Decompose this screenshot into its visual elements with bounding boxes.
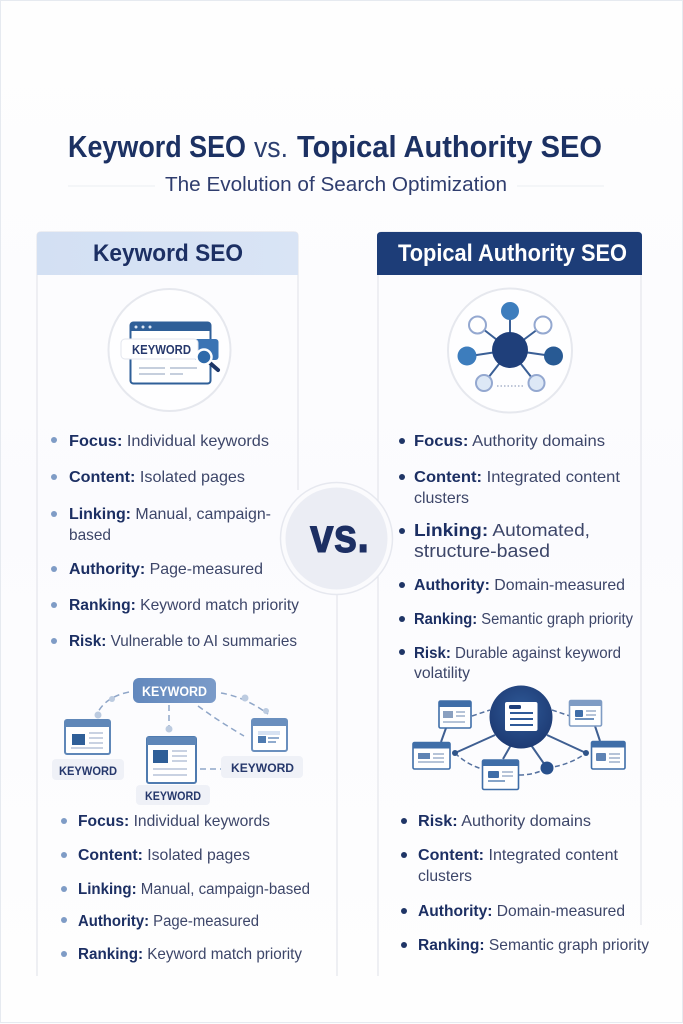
item: content: Content: Isolated pages bbox=[78, 847, 250, 864]
panel header: Topical Authority SEO bbox=[377, 232, 642, 275]
item: linking: Linking: Automated, bbox=[414, 520, 590, 540]
item: authority: Authority: Domain-measured bbox=[418, 903, 625, 920]
panel header: Keyword SEO bbox=[37, 232, 298, 275]
item: risk: Risk: Durable against keyword bbox=[414, 645, 621, 662]
keyword hub pill bbox=[133, 678, 216, 703]
item: linking: Linking: Manual, campaign-based bbox=[78, 881, 310, 898]
vs badge bbox=[280, 482, 392, 594]
icon: topic cluster network bbox=[448, 288, 572, 412]
item: risk bbox=[399, 645, 621, 682]
item: focus: Focus: Individual keywords bbox=[78, 813, 270, 830]
item: content: clusters bbox=[418, 868, 472, 885]
item: content: Content: Isolated pages bbox=[69, 469, 245, 486]
item: linking: structure-based bbox=[414, 541, 550, 561]
page B bbox=[147, 737, 196, 783]
item: linking bbox=[399, 520, 590, 561]
keyword label 3: KEYWORD bbox=[231, 761, 294, 775]
item: linking: based bbox=[69, 527, 111, 544]
item: authority: Authority: Page-measured bbox=[69, 561, 263, 578]
list: keyword SEO attributes bbox=[51, 433, 299, 650]
page 3 bbox=[482, 760, 518, 790]
item: linking bbox=[51, 506, 271, 544]
page C bbox=[252, 719, 287, 751]
keyword label 2 bbox=[136, 785, 210, 805]
item: content: Content: Integrated content bbox=[414, 469, 621, 486]
page 1 bbox=[439, 701, 471, 728]
page 2 bbox=[413, 742, 450, 769]
keyword hub pill: KEYWORD bbox=[142, 684, 207, 699]
page 5 bbox=[592, 742, 625, 769]
item: focus: Focus: Individual keywords bbox=[69, 433, 269, 450]
vs badge: vs. bbox=[310, 510, 369, 563]
keyword label 3 bbox=[221, 756, 303, 778]
page 4 bbox=[570, 700, 602, 726]
page A bbox=[65, 720, 110, 754]
item: content bbox=[401, 847, 619, 885]
item: authority: Authority: Page-measured bbox=[78, 913, 259, 930]
icon: keyword search browser bbox=[108, 289, 230, 411]
keyword label 2: KEYWORD bbox=[145, 789, 201, 803]
item: linking: Linking: Manual, campaign- bbox=[69, 506, 271, 523]
icon: keyword search browser: KEYWORD bbox=[132, 343, 191, 357]
list: topical authority attributes bbox=[399, 433, 633, 682]
keyword label 1 bbox=[52, 759, 124, 780]
title: vs. bbox=[254, 132, 288, 164]
hub document bbox=[490, 686, 552, 748]
item: risk: Risk: Vulnerable to AI summaries bbox=[69, 633, 297, 650]
title: Topical Authority SEO bbox=[297, 129, 602, 164]
item: content: clusters bbox=[414, 490, 469, 507]
item: ranking: Ranking: Semantic graph priority bbox=[418, 937, 649, 954]
panel: Topical Authority SEO bbox=[377, 232, 649, 976]
panel: Keyword SEO bbox=[37, 232, 337, 976]
list: keyword SEO lower attributes bbox=[61, 813, 310, 963]
keyword label 1: KEYWORD bbox=[59, 764, 117, 778]
panel header: Keyword SEO: Keyword SEO bbox=[93, 240, 243, 267]
item: risk: Risk: Authority domains bbox=[418, 813, 591, 830]
item: content: Content: Integrated content bbox=[418, 847, 619, 864]
item: ranking: Ranking: Semantic graph priority bbox=[414, 611, 633, 628]
item: authority: Authority: Domain-measured bbox=[414, 577, 625, 594]
diagram: keyword pages network bbox=[52, 678, 303, 805]
item: content bbox=[399, 469, 621, 507]
item: ranking: Ranking: Keyword match priority bbox=[69, 597, 299, 614]
item: focus: Focus: Authority domains bbox=[414, 433, 605, 450]
panel header: Topical Authority SEO: Topical Authority SEO bbox=[398, 240, 627, 267]
title: Keyword SEO bbox=[68, 129, 246, 164]
item: risk: volatility bbox=[414, 665, 470, 682]
item: ranking: Ranking: Keyword match priority bbox=[78, 946, 302, 963]
subtitle: The Evolution of Search Optimization bbox=[165, 173, 507, 196]
title bbox=[68, 129, 602, 164]
list: topical authority lower attributes bbox=[401, 813, 649, 954]
diagram: topical hub network bbox=[413, 686, 625, 790]
